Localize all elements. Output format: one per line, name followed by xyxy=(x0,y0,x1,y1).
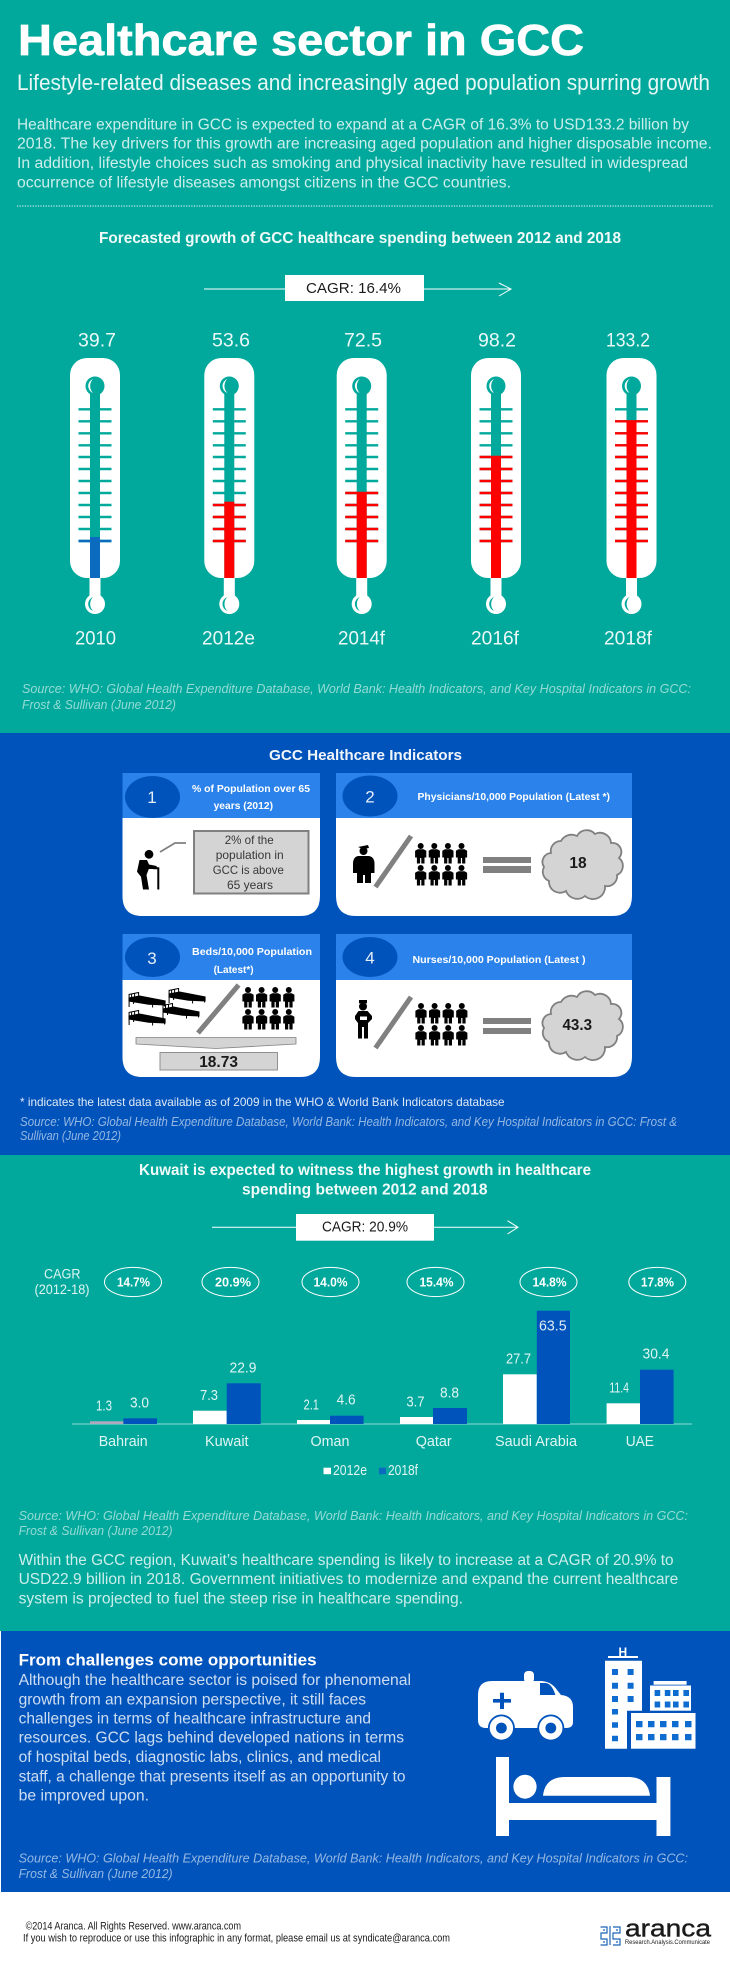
source note: Kuwait chart xyxy=(19,1509,688,1538)
opportunities text block: of hospital beds, diagnostic labs, clinics, and medical xyxy=(19,1749,381,1766)
source note: indicators: Sullivan (June 2012) xyxy=(20,1129,121,1143)
bars: Qatar: Qatar xyxy=(416,1434,452,1450)
callout: 2 percent above 65: population in xyxy=(216,848,284,862)
thermometer: 2012e xyxy=(202,331,255,649)
card 3: beds: (Latest*) xyxy=(214,964,254,976)
CAGR values xyxy=(117,1275,674,1290)
callout cloud: 18 xyxy=(542,830,623,899)
icon: hospital xyxy=(605,1645,696,1749)
bars: UAE: 11.4 xyxy=(609,1381,629,1397)
intro text block: occurrence of lifestyle diseases amongst citizens in the GCC countries. xyxy=(17,174,511,192)
thermometer: 2016f xyxy=(471,331,521,649)
icon: elderly person with cane xyxy=(137,850,158,890)
bars: UAE xyxy=(607,1347,674,1450)
aranca logo: Research.Analysis.Communicate xyxy=(625,1939,710,1946)
thermometer: 2010 xyxy=(70,331,120,649)
bars: Kuwait: 7.3 xyxy=(200,1388,218,1404)
footer copyright: If you wish to reproduce or use this infographic in any format, please email us at syndicate@aranca.com xyxy=(23,1933,450,1945)
icon: population group xyxy=(415,1003,467,1046)
card 4: nurses xyxy=(336,934,632,1077)
bars: Saudi Arabia: 63.5 xyxy=(539,1319,567,1335)
CAGR row label xyxy=(34,1267,90,1297)
bars: Kuwait xyxy=(193,1361,261,1450)
callout: 18.73: 18.73 xyxy=(199,1054,238,1071)
chart legend: 2012e xyxy=(333,1463,367,1479)
thermometer: 2014f: 2014f xyxy=(338,628,386,649)
card 4: nurses: 4 xyxy=(365,948,375,968)
Kuwait text block: Within the GCC region, Kuwait’s healthcare spending is likely to increase at a CAGR of 20.9% to xyxy=(19,1552,674,1569)
bars: Qatar: 3.7 xyxy=(406,1394,425,1410)
bars: UAE: UAE xyxy=(626,1434,654,1450)
bars: Bahrain xyxy=(90,1395,157,1450)
thermometer: 2018f: 2018f xyxy=(604,628,653,649)
thermometer: 2012e: 2012e xyxy=(202,628,255,649)
callout cloud: 18: 18 xyxy=(569,855,587,872)
source note: opportunities: Frost & Sullivan (June 2012) xyxy=(19,1867,173,1881)
arrow: CAGR 20.9% xyxy=(212,1214,518,1241)
CAGR row label: (2012-18) xyxy=(34,1282,90,1297)
brace xyxy=(136,1038,296,1048)
source note: indicators: Source: WHO: Global Health Expenditure Database, World Bank: Health Indicators, and Key Hospital Indicators in GCC: Frost & xyxy=(20,1115,677,1129)
intro text block: Healthcare expenditure in GCC is expected to expand at a CAGR of 16.3% to USD133.2 billion by xyxy=(17,116,689,134)
bars: Oman: Oman xyxy=(310,1434,350,1450)
CAGR values: 14.7% xyxy=(117,1275,150,1290)
heading: forecasted growth: Forecasted growth of GCC healthcare spending between 2012 and 2018 xyxy=(99,230,621,247)
CAGR values: 14.0% xyxy=(314,1275,348,1290)
bars: Bahrain: 3.0 xyxy=(130,1395,149,1411)
callout: 18.73 xyxy=(160,1052,278,1071)
panel: blue healthcare indicators section xyxy=(0,733,730,1155)
card 4: nurses: Nurses/10,000 Population (Latest ) xyxy=(412,954,586,966)
source note: forecast: Frost & Sullivan (June 2012) xyxy=(22,698,176,712)
icon: population group xyxy=(242,987,294,1030)
opportunities text block: challenges in terms of healthcare infrastructure and xyxy=(19,1710,371,1727)
heading: Kuwait highest growth: spending between 2012 and 2018 xyxy=(242,1181,488,1198)
CAGR values: 20.9% xyxy=(215,1275,251,1290)
bars: Bahrain: 1.3 xyxy=(96,1399,112,1415)
panel: teal Kuwait growth section xyxy=(0,1155,730,1631)
opportunities text block: growth from an expansion perspective, it still faces xyxy=(19,1691,366,1708)
source note: Kuwait chart: Frost & Sullivan (June 2012) xyxy=(19,1524,173,1538)
callout: 2 percent above 65: GCC is above xyxy=(213,863,284,877)
icon: population group xyxy=(415,843,467,886)
card 2: physicians: 2 xyxy=(365,788,375,806)
card 2: physicians xyxy=(336,773,632,916)
panel: white footer xyxy=(0,1892,730,1974)
icon: ambulance xyxy=(478,1671,573,1742)
source note: forecast: Source: WHO: Global Health Expenditure Database, World Bank: Health Indicators, and Key Hospital Indicators in GCC: xyxy=(22,682,691,696)
card 3: beds xyxy=(122,934,320,1077)
icon: doctor xyxy=(353,845,374,883)
card 1: population over 65 xyxy=(122,773,320,916)
panel: blue opportunities section xyxy=(1,1631,730,1892)
Kuwait text block: system is projected to fuel the steep rise in healthcare spending. xyxy=(19,1590,463,1607)
equals sign xyxy=(483,1018,531,1034)
callout: 2 percent above 65: 2% of the xyxy=(225,833,274,847)
bars: Qatar: 8.8 xyxy=(440,1385,459,1401)
source note: Kuwait chart: Source: WHO: Global Health Expenditure Database, World Bank: Health Indicators, and Key Hospital Indicators in GCC: xyxy=(19,1509,688,1523)
card 1: population over 65: % of Population over 65 xyxy=(192,783,310,795)
source note: opportunities: Source: WHO: Global Health Expenditure Database, World Bank: Health Indicators, and Key Hospital Indicators in GCC: xyxy=(19,1851,688,1865)
panel: teal header and forecast section xyxy=(0,0,730,733)
bars: Kuwait: 22.9 xyxy=(230,1361,256,1377)
title: Healthcare sector in GCC xyxy=(18,16,584,65)
chart legend xyxy=(324,1463,419,1479)
arrow: CAGR 16.4% xyxy=(204,275,511,301)
bar chart: healthcare spending by country xyxy=(72,1311,692,1450)
bars: Kuwait: Kuwait xyxy=(205,1434,249,1450)
Kuwait text block: USD22.9 billion in 2018. Government initiatives to modernize and expand the current healthcare xyxy=(19,1571,678,1588)
intro text block: In addition, lifestyle choices such as smoking and physical inactivity have resulted in widespread xyxy=(17,155,688,172)
bars: Oman: 2.1 xyxy=(304,1397,319,1413)
icon: nurse xyxy=(355,1000,372,1038)
bars: Oman: 4.6 xyxy=(337,1393,356,1409)
chart legend: 2018f xyxy=(388,1463,419,1479)
opportunities text block: staff, a challenge that presents itself as an opportunity to xyxy=(19,1768,405,1785)
callout: 2 percent above 65: 65 years xyxy=(227,878,273,892)
footer copyright xyxy=(23,1921,450,1945)
thermometer: 2018f xyxy=(604,331,656,649)
card 2: physicians: Physicians/10,000 Population (Latest *) xyxy=(418,791,610,803)
card 1: population over 65: years (2012) xyxy=(214,800,273,812)
CAGR values: 15.4% xyxy=(420,1275,454,1290)
source note: forecast xyxy=(22,682,691,712)
bars: UAE: 30.4 xyxy=(642,1347,670,1363)
icon: hospital bed xyxy=(496,1757,670,1836)
bars: Saudi Arabia xyxy=(495,1311,578,1450)
thermometer: 2016f: 98.2 xyxy=(478,331,516,352)
thermometer: 2018f: 133.2 xyxy=(606,331,650,352)
opportunities text block: be improved upon. xyxy=(19,1787,149,1804)
Kuwait text block xyxy=(19,1552,678,1607)
CAGR values: 17.8% xyxy=(641,1275,674,1290)
CAGR values: 14.8% xyxy=(532,1275,567,1290)
icon: beds xyxy=(129,988,206,1026)
card 3: beds: 3 xyxy=(147,949,157,968)
bars: Qatar xyxy=(400,1385,467,1450)
bars: Saudi Arabia: Saudi Arabia xyxy=(495,1434,578,1450)
footnote: * indicates the latest data available as of 2009 in the WHO & World Bank Indicators database xyxy=(20,1095,505,1109)
thermometer chart xyxy=(70,331,656,649)
opportunities text block xyxy=(19,1672,411,1804)
thermometer: 2016f: 2016f xyxy=(471,628,520,649)
source note: indicators xyxy=(20,1115,677,1143)
callout cloud: 43.3: 43.3 xyxy=(562,1017,592,1034)
callout cloud: 43.3 xyxy=(542,991,623,1060)
opportunities text block: Although the healthcare sector is poised for phenomenal xyxy=(19,1672,411,1689)
equals sign xyxy=(483,857,531,873)
opportunities text block: resources. GCC lags behind developed nations in terms xyxy=(19,1730,404,1747)
source note: opportunities xyxy=(19,1851,688,1881)
CAGR row label: CAGR xyxy=(44,1267,81,1282)
card 3: beds: Beds/10,000 Population xyxy=(192,946,312,958)
aranca logo xyxy=(600,1916,712,1946)
arrow: CAGR 20.9%: CAGR: 20.9% xyxy=(322,1220,408,1236)
card 1: population over 65: 1 xyxy=(147,788,157,807)
thermometer: 2010: 2010 xyxy=(75,628,116,649)
bars: Bahrain: Bahrain xyxy=(99,1434,148,1450)
heading: GCC healthcare indicators: GCC Healthcare Indicators xyxy=(269,747,462,764)
heading: Kuwait highest growth: Kuwait is expected to witness the highest growth in healthcare xyxy=(139,1162,591,1179)
CAGR ovals xyxy=(104,1267,686,1297)
bars: Saudi Arabia: 27.7 xyxy=(506,1352,531,1368)
aranca logo: aranca xyxy=(625,1916,712,1943)
bars: Oman xyxy=(297,1393,364,1450)
thermometer: 2014f: 72.5 xyxy=(344,331,382,352)
icon: hospital: H xyxy=(618,1645,627,1659)
heading: Kuwait highest growth xyxy=(139,1162,591,1198)
footer copyright: ©2014 Aranca. All Rights Reserved. www.aranca.com xyxy=(26,1921,241,1933)
thermometer: 2014f xyxy=(337,331,387,649)
heading: From challenges come opportunities: From challenges come opportunities xyxy=(19,1651,317,1670)
intro text block: 2018. The key drivers for this growth are increasing aged population and higher disposable income. xyxy=(17,136,712,152)
arrow: CAGR 16.4%: CAGR: 16.4% xyxy=(306,280,401,297)
thermometer: 2012e: 53.6 xyxy=(212,331,250,352)
intro text block xyxy=(17,116,712,192)
callout: 2 percent above 65 xyxy=(194,831,308,894)
thermometer: 2010: 39.7 xyxy=(78,331,116,352)
